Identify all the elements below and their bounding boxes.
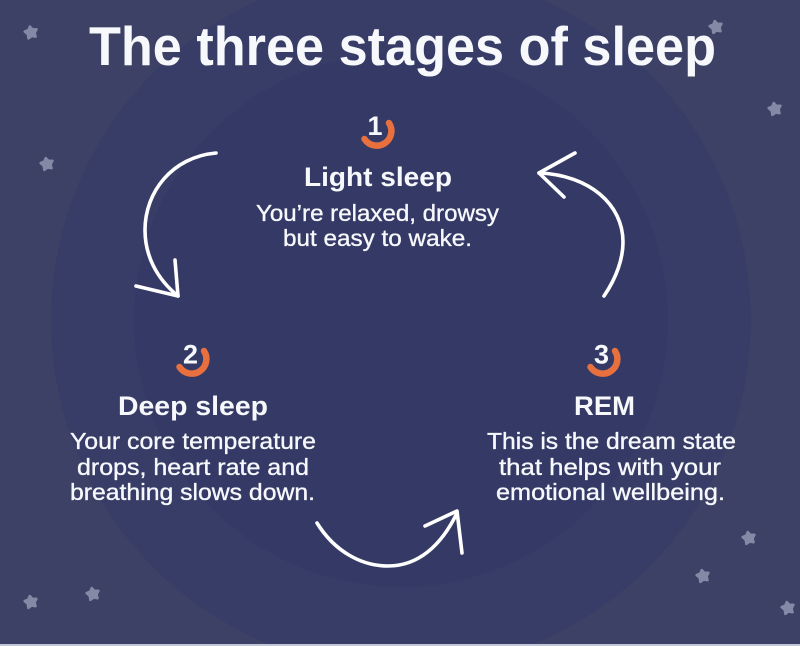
heading: REM: REM <box>574 391 635 421</box>
badge: number 2: 2 <box>183 340 198 370</box>
badge: number 3 <box>590 340 617 374</box>
text: light sleep description <box>256 200 500 251</box>
title: The three stages of sleep <box>89 15 716 77</box>
arrow: deep sleep to REM <box>317 511 462 566</box>
badge: number 1 <box>364 111 391 146</box>
text: deep sleep description: drops, heart rate and <box>77 454 309 480</box>
bottom edge strip <box>0 644 800 646</box>
text: light sleep description: You’re relaxed, drowsy <box>256 200 500 226</box>
stage 3: REM <box>487 340 736 505</box>
arrow: light sleep to deep sleep <box>136 153 216 296</box>
badge: number 3: 3 <box>594 340 609 370</box>
heading: light sleep: Light sleep <box>304 162 452 192</box>
stage 1: light sleep <box>256 111 500 251</box>
stage 2: deep sleep <box>70 340 316 505</box>
badge: number 1: 1 <box>367 111 383 141</box>
text: light sleep description: but easy to wake. <box>283 225 472 251</box>
background: inner circle <box>134 53 668 587</box>
heading: deep sleep: Deep sleep <box>118 391 268 421</box>
text: deep sleep description <box>70 428 316 505</box>
text: REM description: emotional wellbeing. <box>496 479 725 505</box>
arrow: REM to light sleep <box>539 153 623 296</box>
text: deep sleep description: breathing slows down. <box>70 479 315 505</box>
text: REM description: that helps with your <box>499 454 721 480</box>
text: REM description <box>487 428 736 505</box>
text: REM description: This is the dream state <box>487 428 736 454</box>
text: deep sleep description: Your core temperature <box>70 428 316 454</box>
badge: number 2 <box>180 340 206 374</box>
